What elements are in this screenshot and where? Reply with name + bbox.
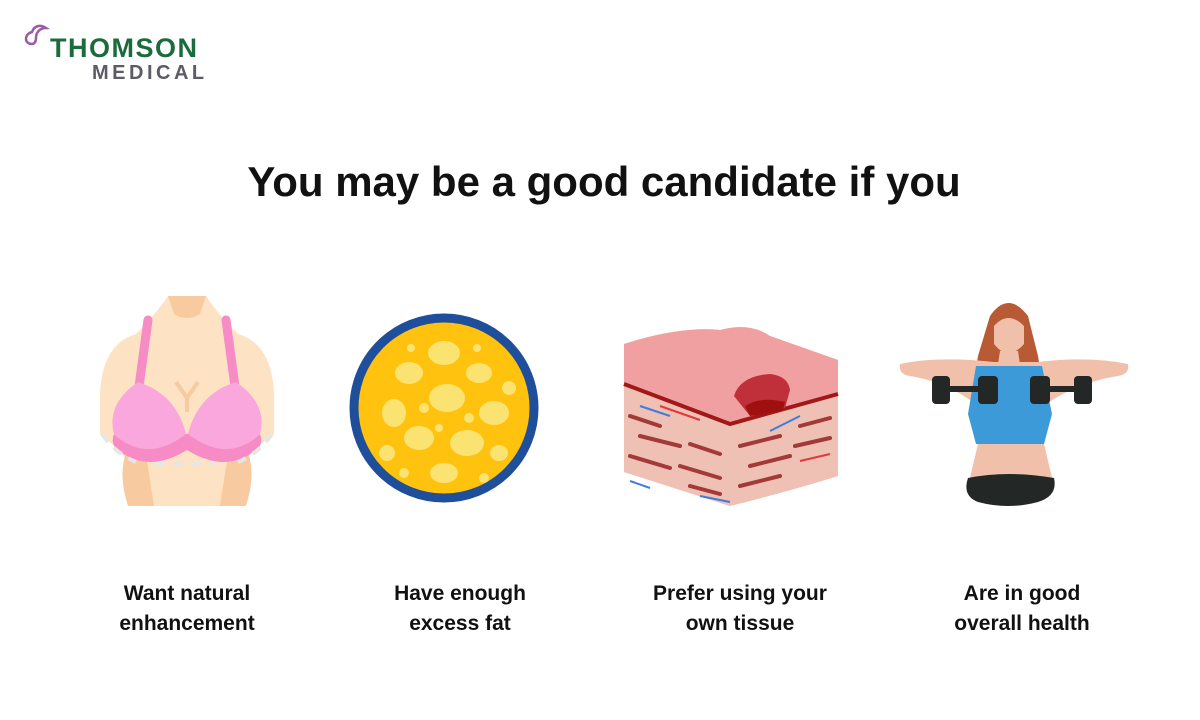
label 4: overall health: [954, 612, 1090, 635]
logo text: THOMSON: [50, 33, 198, 63]
title: You may be a good candidate if you: [247, 158, 961, 205]
label 4: [954, 582, 1090, 635]
label 1: [119, 582, 255, 635]
label 2: [394, 582, 526, 635]
label 1: Want natural: [124, 582, 250, 605]
icon: bra torso: [100, 296, 274, 506]
icon: tissue block: [623, 327, 838, 506]
label 3: own tissue: [686, 612, 794, 635]
label 1: enhancement: [119, 612, 255, 635]
logo: [24, 24, 208, 84]
label 3: [653, 582, 827, 635]
icon: butterfly: [24, 24, 50, 46]
label 4: Are in good: [964, 582, 1080, 605]
label 3: Prefer using your: [653, 582, 827, 605]
label 2: Have enough: [394, 582, 526, 605]
label 2: excess fat: [409, 612, 511, 635]
icon: fat cells: [350, 314, 538, 502]
logo: MEDICAL: [92, 62, 208, 84]
icon: woman with dumbbells: [900, 303, 1128, 506]
